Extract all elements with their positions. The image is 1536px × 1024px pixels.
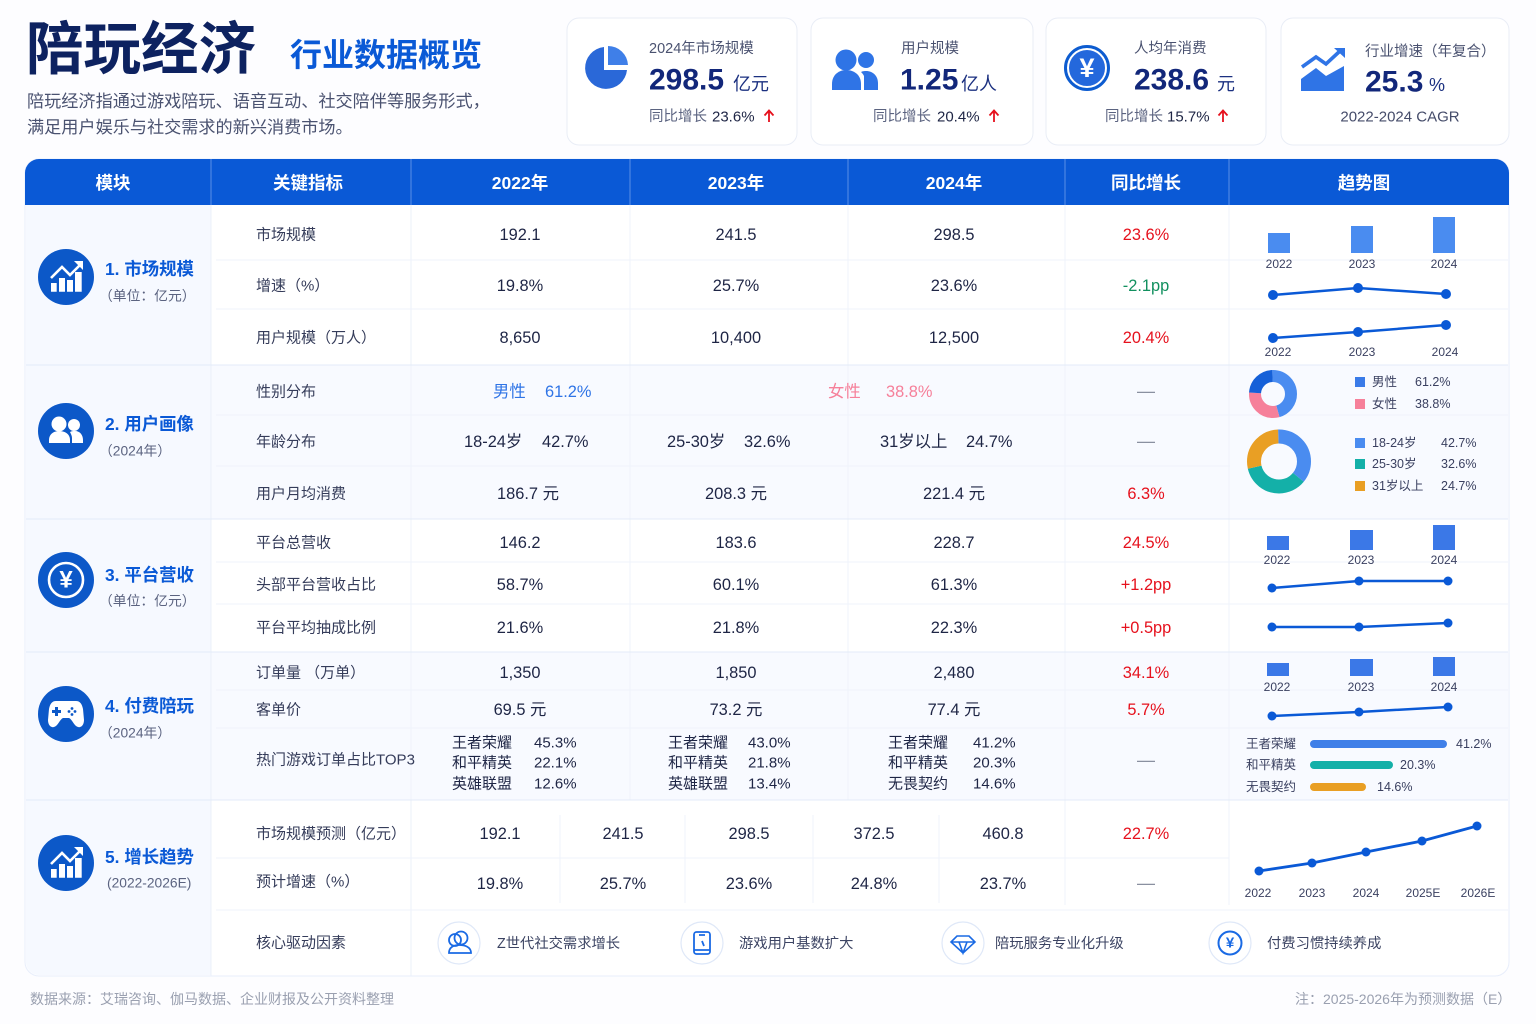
panel: data table [25,159,1509,976]
legend: gender [1355,375,1450,411]
bar chart: market size trend [1266,217,1458,271]
icon: trend area [1301,48,1345,91]
section 1 rows: 241.5 [715,226,757,244]
section 4 rows: 41.2% [973,734,1016,752]
section 1 rows: 25.7% [713,277,759,295]
section 5 rows: — [1137,873,1155,893]
legend: age: 18-24岁 [1372,435,1416,450]
horizontal bar chart: top games: 20.3% [1400,758,1435,772]
section 1 heading: market size: 1. 市场规模 [105,259,195,279]
panel: KPI market size: 23.6% [712,108,755,126]
donut chart: gender [1255,376,1291,412]
section 1 rows: -2.1pp [1123,277,1169,295]
description text: 陪玩经济指通过游戏陪玩、语音互动、社交陪伴等服务形式， [27,91,490,111]
icon: yuan: ¥ [59,566,73,594]
line chart: 2022-2026E forecast: 2022 [1245,886,1272,900]
panel: KPI spend per user: 15.7% [1167,108,1210,126]
section 1 rows: 市场规模 [256,226,316,244]
table header: 2022年 [492,173,548,193]
section 2 rows: 用户月均消费 [256,486,346,502]
section 2 heading: user profile: 2. 用户画像 [105,414,195,434]
line chart: user size trend [1265,320,1459,359]
line chart: user size trend: 2023 [1349,345,1376,359]
icon: users [832,50,878,90]
panel: KPI spend per user [1046,18,1266,145]
section 3 rows: 平台总营收 [256,534,331,552]
icon: mobile phone [681,922,723,964]
section 4 rows: 和平精英 [452,754,512,772]
section 4 rows: — [1137,750,1155,770]
panel: KPI market size: 同比增长 [649,108,707,125]
section 3 rows: 58.7% [497,576,543,594]
section 3 heading: platform revenue: 3. 平台营收 [105,565,194,585]
section 3 rows: 22.3% [931,619,977,637]
bar chart: market size trend: 2022 [1266,257,1293,271]
panel: KPI CAGR: 25.3 [1365,66,1423,98]
bar chart: market size trend: 2023 [1349,257,1376,271]
panel: KPI market size [567,18,797,145]
icon: users [38,403,94,459]
section 1 rows: 192.1 [499,226,541,244]
section 2 rows: 性别分布 [256,384,316,400]
section 4 rows: 21.8% [748,754,791,772]
legend: gender: 女性 [1372,396,1397,411]
panel: KPI user size: 1.25 [900,64,958,96]
section 4 rows: 英雄联盟 [452,774,512,792]
section 4 rows: 45.3% [534,734,577,752]
bar chart: orders trend [1264,657,1458,694]
section 2 rows: 25-30岁 [667,433,725,451]
legend: age [1355,435,1476,493]
legend: age: 31岁以上 [1372,478,1423,493]
section 4 heading: paid companionship [38,686,195,742]
section 2 rows: — [1137,431,1155,451]
section 4 rows: 王者荣耀 [888,734,948,752]
section 3 rows [256,534,1171,637]
section 5 heading: growth trend: (2022-2026E) [107,876,191,890]
section 2 rows: 32.6% [744,433,790,451]
section 5 rows: 460.8 [982,825,1024,843]
bar chart: platform revenue trend: 2024 [1431,553,1458,567]
section 2 rows: 42.7% [542,433,588,451]
panel: KPI spend per user: 238.6 [1134,64,1209,96]
line chart: growth rate trend [1268,283,1451,300]
horizontal bar chart: top games: 王者荣耀 [1246,737,1297,751]
core drivers row: 付费习惯持续养成 [1267,935,1381,952]
section 1 rows: 298.5 [933,226,975,244]
core drivers row [256,922,1381,964]
section 5 rows: 市场规模预测（亿元） [256,826,406,842]
icon: yuan [1209,922,1251,964]
table header [25,159,1509,205]
section 4 rows [256,664,1169,792]
section 4 rows: 77.4 元 [928,701,980,719]
line chart: commission rate [1268,618,1452,632]
line chart: top platform share [1268,576,1452,592]
section 5 rows: 298.5 [728,825,770,843]
section 4 heading: paid companionship: （2024年） [99,726,171,740]
bar chart: orders trend: 2024 [1431,680,1458,694]
legend: age: 42.7% [1441,436,1476,450]
bar chart: platform revenue trend: 2023 [1348,553,1375,567]
legend: age: 32.6% [1441,457,1476,471]
section 5 rows: 23.6% [726,875,772,893]
section 3 rows: 60.1% [713,576,759,594]
section 2 heading: user profile: （2024年） [99,444,171,458]
legend: age: 25-30岁 [1372,456,1416,471]
section 1 rows [256,226,1169,347]
donut chart: age [1254,436,1304,486]
section 2 rows [256,381,1165,503]
section 4 rows: 订单量 （万单） [256,664,365,682]
section 1 rows: 19.8% [497,277,543,295]
section 3 rows: 228.7 [933,534,975,552]
section 2 rows: 186.7 元 [497,485,559,503]
section 3 rows: +1.2pp [1121,576,1171,594]
bar chart: orders trend: 2022 [1264,680,1291,694]
horizontal bar chart: top games [1246,737,1491,794]
description text [27,91,490,137]
table header: 关键指标 [273,173,343,193]
section 4 rows: 13.4% [748,776,791,792]
section 4 heading: paid companionship: 4. 付费陪玩 [105,696,195,716]
panel: KPI market size: 2024年市场规模 [649,40,754,57]
section 4 rows: 5.7% [1127,701,1165,719]
section 5 heading: growth trend: 5. 增长趋势 [105,847,194,867]
core drivers row: Z世代社交需求增长 [497,934,620,952]
core drivers row: 核心驱动因素 [256,934,346,952]
section 2 rows: 年龄分布 [256,434,316,450]
horizontal bar chart: top games: 无畏契约 [1246,779,1296,794]
panel: KPI market size: 亿元 [733,74,769,94]
footer note: 注：2025-2026年为预测数据（E） [1295,991,1511,1007]
line chart: 2022-2026E forecast [1245,822,1495,900]
footer source: 数据来源：艾瑞咨询、伽马数据、企业财报及公开资料整理 [30,991,394,1007]
section 4 rows: 和平精英 [668,754,728,772]
panel: KPI CAGR [1281,18,1509,145]
section 1 rows: 10,400 [711,329,761,347]
section 2 rows: 61.2% [545,383,591,401]
section 5 rows: 25.7% [600,875,646,893]
section 5 rows: 192.1 [479,825,521,843]
section 3 rows: 21.6% [497,619,543,637]
bar chart: orders trend: 2023 [1348,680,1375,694]
core drivers row: 游戏用户基数扩大 [739,935,853,952]
section 3 rows: 21.8% [713,619,759,637]
legend: gender: 61.2% [1415,375,1450,389]
bar chart: market size trend: 2024 [1431,257,1458,271]
icon: Gen Z users [438,922,480,964]
icon: yuan coin [1065,46,1109,90]
section 2 rows: 24.7% [966,433,1012,451]
icon: pie chart [585,46,628,89]
legend: gender: 38.8% [1415,397,1450,411]
panel: KPI CAGR: % [1429,75,1445,95]
section 1 rows: 20.4% [1123,329,1169,347]
icon: yuan [38,552,94,608]
section 3 rows: 61.3% [931,576,977,594]
section 3 rows: +0.5pp [1121,619,1171,637]
section 4 rows: 客单价 [256,702,301,718]
section 1 heading: market size [38,249,196,305]
section 1 rows: 23.6% [931,277,977,295]
section 4 rows: 22.1% [534,754,577,772]
table header: 趋势图 [1338,173,1390,193]
section 5 heading: growth trend [38,835,194,891]
section 4 rows: 20.3% [973,754,1016,772]
core drivers row: 陪玩服务专业化升级 [995,935,1124,952]
section 3 rows: 183.6 [715,534,757,552]
section 3 rows: 平台平均抽成比例 [256,620,376,636]
panel: KPI user size: 用户规模 [901,40,959,57]
icon: game controller [38,686,94,742]
line chart: 2022-2026E forecast: 2024 [1353,886,1380,900]
description text: 满足用户娱乐与社交需求的新兴消费市场。 [27,117,353,137]
section 1 rows: 用户规模（万人） [256,330,376,346]
panel: KPI user size: 亿人 [961,74,997,94]
section 3 heading: platform revenue [38,552,196,608]
bar chart: platform revenue trend: 2022 [1264,553,1291,567]
section 4 rows: 英雄联盟 [668,774,728,792]
section 4 rows: 1,850 [715,664,757,682]
section 3 rows: 146.2 [499,534,541,552]
subtitle: 行业数据概览 [290,37,482,73]
horizontal bar chart: top games: 41.2% [1456,737,1491,751]
section 2 rows: — [1137,381,1155,401]
section 5 rows: 372.5 [853,825,895,843]
section 2 rows: 18-24岁 [464,433,522,451]
section 5 rows: 19.8% [477,875,523,893]
section 4 rows: 王者荣耀 [668,734,728,752]
section 1 rows: 8,650 [499,329,541,347]
section 4 rows: 34.1% [1123,664,1169,682]
line chart: user size trend: 2022 [1265,345,1292,359]
panel: KPI user size: 同比增长 [873,108,931,125]
section 3 rows: 24.5% [1123,534,1169,552]
section 2 rows: 男性 [493,383,526,401]
icon: growth chart [38,835,94,891]
section 2 rows: 31岁以上 [880,433,947,451]
line chart: 2022-2026E forecast: 2025E [1406,886,1440,900]
section 4 rows: 43.0% [748,734,791,752]
line chart: user size trend: 2024 [1432,345,1459,359]
section 1 rows: 23.6% [1123,226,1169,244]
icon: growth chart [38,249,94,305]
section 4 rows: 14.6% [973,776,1016,792]
section 4 rows: 12.6% [534,776,577,792]
section 4 rows: 2,480 [933,664,975,682]
section 2 rows: 38.8% [886,383,932,401]
line chart: average order value [1268,702,1452,720]
horizontal bar chart: top games: 14.6% [1377,780,1412,794]
section 3 rows: 头部平台营收占比 [256,576,376,594]
panel: KPI CAGR: 行业增速（年复合） [1365,42,1496,60]
section 5 rows [256,825,1169,893]
panel: KPI spend per user: 元 [1217,74,1235,94]
section 3 heading: platform revenue: （单位：亿元） [99,594,196,608]
panel: KPI spend per user: 同比增长 [1105,108,1163,125]
icon: yuan coin: ¥ [1079,53,1095,83]
section 4 rows: 和平精英 [888,754,948,772]
panel: KPI market size: 298.5 [649,64,724,96]
icon: diamond [942,922,984,964]
section 5 rows: 22.7% [1123,825,1169,843]
icon: yuan: ¥ [1226,934,1235,952]
section 2 rows: 6.3% [1127,485,1165,503]
panel: KPI user size: 20.4% [937,108,980,126]
legend: age: 24.7% [1441,479,1476,493]
table header: 2024年 [926,173,982,193]
section 1 rows: 增速（%） [256,278,329,294]
bar chart: platform revenue trend [1264,525,1458,567]
section 2 rows: 221.4 元 [923,485,985,503]
section 4 rows: 1,350 [499,664,541,682]
section 2 rows: 女性 [828,382,861,401]
table header: 2023年 [708,173,764,193]
legend: gender: 男性 [1372,375,1397,389]
section 2 rows: 208.3 元 [705,485,767,503]
table header: 同比增长 [1111,173,1181,193]
section 5 rows: 241.5 [602,825,644,843]
section 4 rows: 69.5 元 [494,701,546,719]
title: 陪玩经济 [26,18,256,82]
section 4 rows: 73.2 元 [710,701,762,719]
panel: KPI spend per user: 人均年消费 [1134,40,1206,57]
section 5 rows: 24.8% [851,875,897,893]
panel: KPI CAGR: 2022-2024 CAGR [1340,108,1460,126]
section 4 rows: 热门游戏订单占比TOP3 [256,752,415,768]
line chart: 2022-2026E forecast: 2023 [1299,886,1326,900]
section 4 rows: 无畏契约 [888,776,948,792]
section 4 rows: 王者荣耀 [452,734,512,752]
horizontal bar chart: top games: 和平精英 [1246,758,1297,772]
panel: KPI user size [811,18,1033,145]
section 2 heading: user profile [38,403,195,459]
section 1 rows: 12,500 [929,329,979,347]
line chart: 2022-2026E forecast: 2026E [1461,886,1495,900]
section 1 heading: market size: （单位：亿元） [99,288,196,304]
table header: 模块 [96,173,130,193]
section 5 rows: 23.7% [980,875,1026,893]
section 5 rows: 预计增速（%） [256,874,359,890]
